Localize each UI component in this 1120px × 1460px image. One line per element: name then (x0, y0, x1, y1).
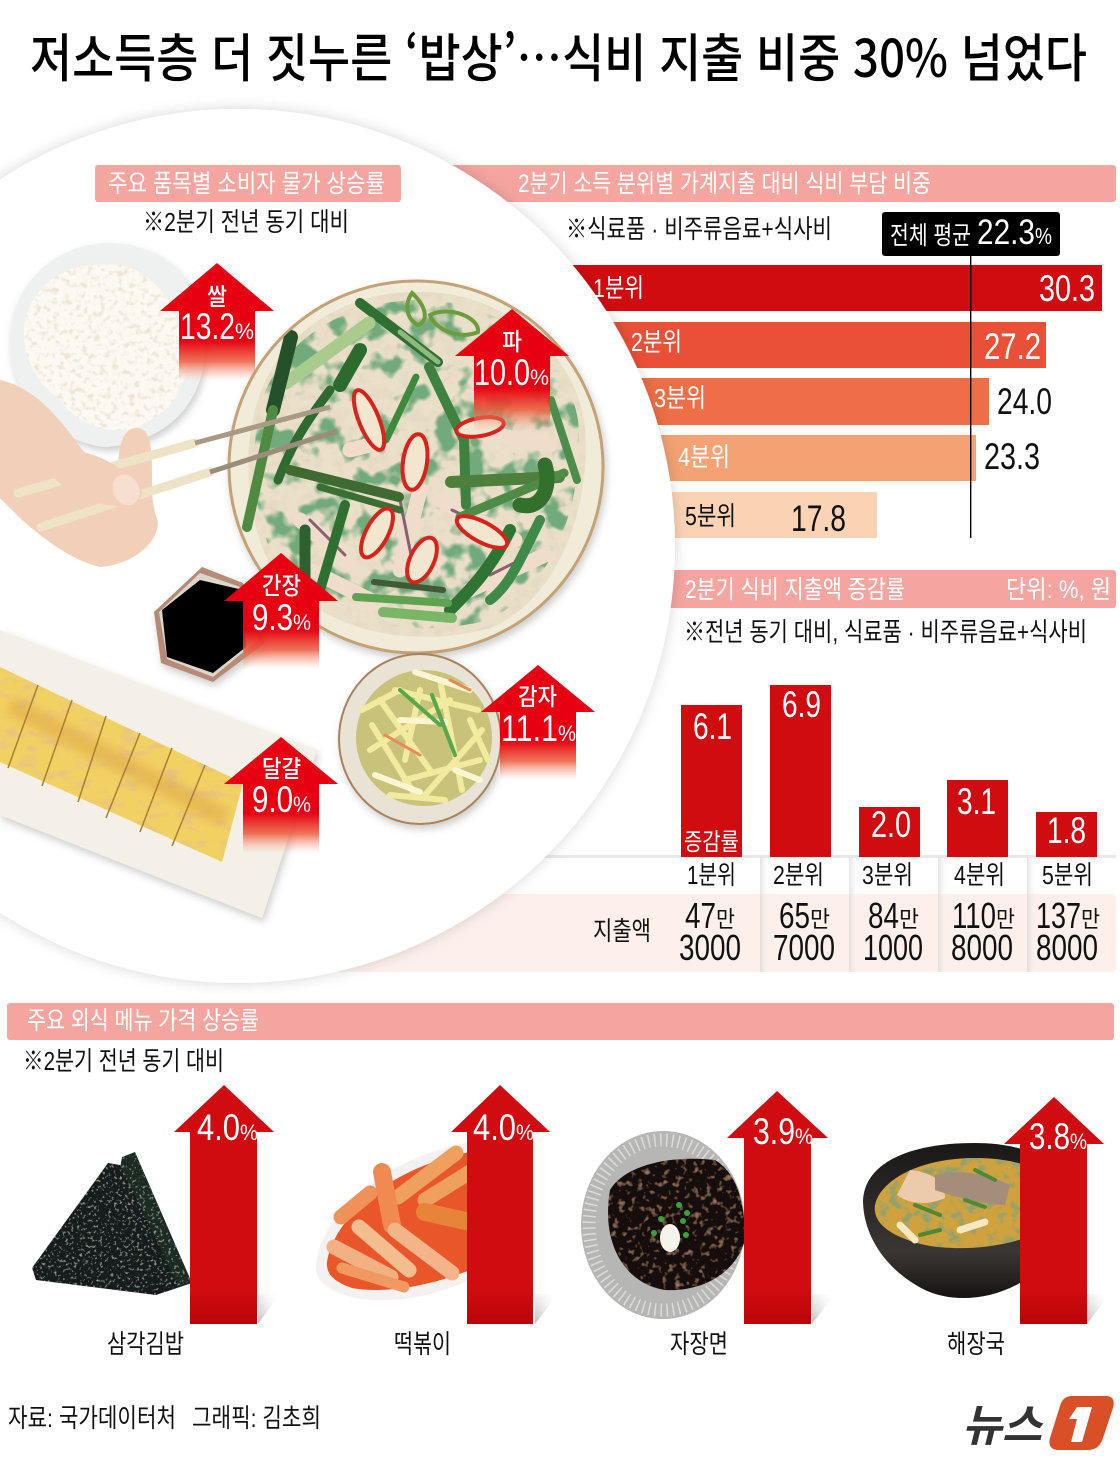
column: quintile 1: 6.1 (693, 706, 732, 747)
column: quintile 1: 증감률 (684, 829, 739, 856)
logo: News1: 뉴스 (962, 1402, 1043, 1451)
panel: dining out menu price rises (7, 1003, 1114, 1359)
arrow: haejangguk 3.8%: 3.8 (1029, 1116, 1070, 1157)
illustration: jajangmyeon (581, 1131, 745, 1319)
illustration: potato side dish (339, 654, 501, 824)
white dinner table circle (0, 109, 675, 983)
bar: quintile 1 (500, 265, 1102, 311)
expenditure: quintile 1 (679, 895, 741, 968)
heading: dining out prices (7, 1003, 1114, 1040)
arrow: kimbap 4.0%: 4.0 (197, 1107, 240, 1148)
heading: food spending change (640, 570, 1116, 608)
illustration: rolled omelette plate (0, 630, 317, 918)
arrow: soy sauce 9.3%: 9.3 (252, 597, 293, 638)
expenditure: quintile 1: 3000 (679, 927, 741, 968)
bar: quintile 4 (500, 435, 1040, 481)
expenditure: quintile 4 (951, 895, 1015, 968)
arrow: rice 13.2%: 13.2 (180, 306, 235, 347)
callout: overall average: 22.3 (977, 213, 1035, 252)
label: tteokbokki: 떡볶이 (394, 1329, 451, 1359)
arrow: potato 11.1%: 11.1 (501, 708, 558, 749)
expenditure: quintile 3: 1000 (863, 927, 923, 968)
expenditure: quintile 5: 8000 (1036, 927, 1098, 968)
column: quintile 4 (947, 780, 1008, 857)
quintile axis labels: 5분위 (1042, 860, 1093, 890)
arrow: egg 9.0%: % (293, 792, 311, 817)
heading: income quintile share: 2분기 소득 분위별 가계지출 대비 식비 부담 비중 (518, 170, 931, 198)
note: food scope: ※식료품 · 비주류음료+식사비 (566, 214, 832, 244)
axis base line (500, 855, 1116, 858)
arrow: soy sauce 9.3%: 간장 (262, 573, 301, 600)
illustration: hand with chopsticks (0, 380, 337, 567)
expenditure: quintile 2: 7000 (773, 927, 835, 968)
expenditure: quintile 2: 65 (779, 895, 810, 936)
heading: item price rises (95, 165, 401, 202)
bar: quintile 2: 2분위 (631, 327, 682, 357)
arrow: rice 13.2%: 쌀 (207, 284, 227, 311)
bar: quintile 3 (500, 378, 1052, 425)
arrow: scallion 10.0%: 10.0 (474, 352, 530, 393)
expenditure: quintile 2 (773, 895, 835, 968)
illustration: rice bowl (10, 243, 205, 447)
column: quintile 2 (770, 684, 831, 857)
column: quintile 3: 2.0 (871, 804, 911, 845)
bar: quintile 1: 30.3 (1039, 268, 1095, 309)
heading: dining out prices: 주요 외식 메뉴 가격 상승률 (27, 1007, 259, 1035)
column: quintile 2: 6.9 (782, 684, 821, 725)
arrow: scallion 10.0%: 파 (502, 329, 522, 356)
arrow: potato 11.1%: % (558, 721, 576, 746)
source and credit: 자료: 국가데이터처 (8, 1403, 176, 1433)
expenditure band (300, 894, 1116, 972)
arrow: egg 9.0%: 달걀 (262, 756, 301, 783)
quintile axis labels (687, 860, 1093, 890)
expenditure label: 지출액 (593, 916, 651, 946)
heading: food spending change: 2분기 식비 지출액 증감률 (685, 576, 905, 604)
expenditure: quintile 4: 만 (996, 906, 1015, 932)
arrow: rice 13.2%: % (235, 319, 254, 344)
arrow: haejangguk 3.8% (1004, 1097, 1110, 1324)
column: quintile 3 (859, 804, 920, 857)
arrow: soy sauce 9.3% (224, 553, 338, 669)
illustration: triangle kimbap (32, 1152, 192, 1295)
bar: quintile 4: 4분위 (678, 442, 730, 472)
expenditure: quintile 1: 만 (716, 906, 735, 932)
column: quintile 4: 3.1 (957, 781, 996, 822)
quintile axis labels: 1분위 (687, 860, 736, 890)
panel: share of food spending by income quintile (440, 165, 1116, 539)
illustration: tteokbokki (316, 1142, 470, 1300)
heading: income quintile share (440, 165, 1116, 202)
label: jajangmyeon: 자장면 (670, 1329, 728, 1359)
bar: quintile 3: 24.0 (997, 381, 1052, 422)
illustration: soy sauce dish (154, 567, 265, 682)
quintile axis labels: 2분위 (773, 860, 824, 890)
column: quintile 1 (681, 705, 742, 857)
callout: overall average: 전체 평균 (890, 222, 971, 250)
quintile axis labels: 3분위 (862, 860, 913, 890)
expenditure: quintile 4: 110 (952, 895, 996, 936)
bar: quintile 5: 5분위 (685, 501, 736, 531)
panel: food spending change rate by quintile (300, 570, 1116, 972)
callout: overall average: % (1035, 223, 1052, 249)
label: haejangguk: 해장국 (947, 1329, 1005, 1359)
arrow: soy sauce 9.3%: % (293, 610, 311, 635)
expenditure: quintile 3: 만 (899, 906, 919, 932)
arrow: scallion 10.0% (455, 309, 569, 431)
arrow: haejangguk 3.8%: % (1070, 1129, 1087, 1154)
arrow: egg 9.0%: 9.0 (252, 779, 293, 820)
arrow: jajangmyeon 3.9%: % (795, 1124, 813, 1149)
label: kimbap: 삼각김밥 (107, 1329, 184, 1359)
bar: quintile 3: 3분위 (654, 383, 706, 413)
arrow: kimbap 4.0%: % (240, 1120, 258, 1145)
panel: consumer price rises by item (0, 165, 603, 918)
bar: quintile 1: 1분위 (593, 273, 644, 303)
arrow: potato 11.1%: 감자 (518, 684, 557, 711)
arrow: jajangmyeon 3.9% (727, 1091, 835, 1324)
note: year on year: ※2분기 전년 동기 대비 (143, 207, 349, 237)
bar: quintile 5: 17.8 (791, 498, 846, 539)
source and credit (8, 1403, 321, 1433)
expenditure: quintile 3: 84 (868, 895, 899, 936)
logo: News1 (962, 1396, 1114, 1451)
arrow: egg 9.0% (224, 737, 338, 853)
callout: overall average (882, 212, 1060, 256)
arrow: kimbap 4.0% (174, 1085, 280, 1324)
expenditure: quintile 5: 137 (1036, 895, 1081, 936)
note: year on year: ※2분기 전년 동기 대비 (23, 1046, 224, 1076)
average line (970, 250, 971, 538)
illustration: haejangguk (863, 1143, 1025, 1298)
expenditure: quintile 5 (1036, 895, 1100, 968)
arrow: scallion 10.0%: % (530, 365, 549, 390)
expenditure: quintile 3 (863, 895, 923, 968)
heading: item price rises: 주요 품목별 소비자 물가 상승률 (108, 170, 385, 198)
arrow: tteokbokki 4.0% (451, 1085, 558, 1324)
bar: quintile 2: 27.2 (984, 326, 1041, 367)
bar: quintile 5 (500, 492, 877, 539)
arrow: tteokbokki 4.0%: % (516, 1120, 534, 1145)
source and credit: 그래픽: 김초희 (192, 1403, 321, 1433)
arrow: jajangmyeon 3.9%: 3.9 (753, 1111, 795, 1152)
illustration: scallion pancake (229, 281, 603, 653)
expenditure: quintile 5: 만 (1081, 906, 1100, 932)
expenditure: quintile 2: 만 (810, 906, 830, 932)
arrow: rice 13.2% (160, 263, 274, 381)
expenditure: quintile 1: 47 (685, 895, 716, 936)
expenditure: quintile 4: 8000 (951, 927, 1013, 968)
column: quintile 5: 1.8 (1047, 810, 1086, 851)
bar: quintile 2 (500, 322, 1046, 368)
quintile axis labels: 4분위 (954, 860, 1005, 890)
arrow: tteokbokki 4.0%: 4.0 (473, 1107, 516, 1148)
bar: quintile 4: 23.3 (984, 436, 1040, 477)
arrow: potato 11.1% (481, 665, 595, 780)
